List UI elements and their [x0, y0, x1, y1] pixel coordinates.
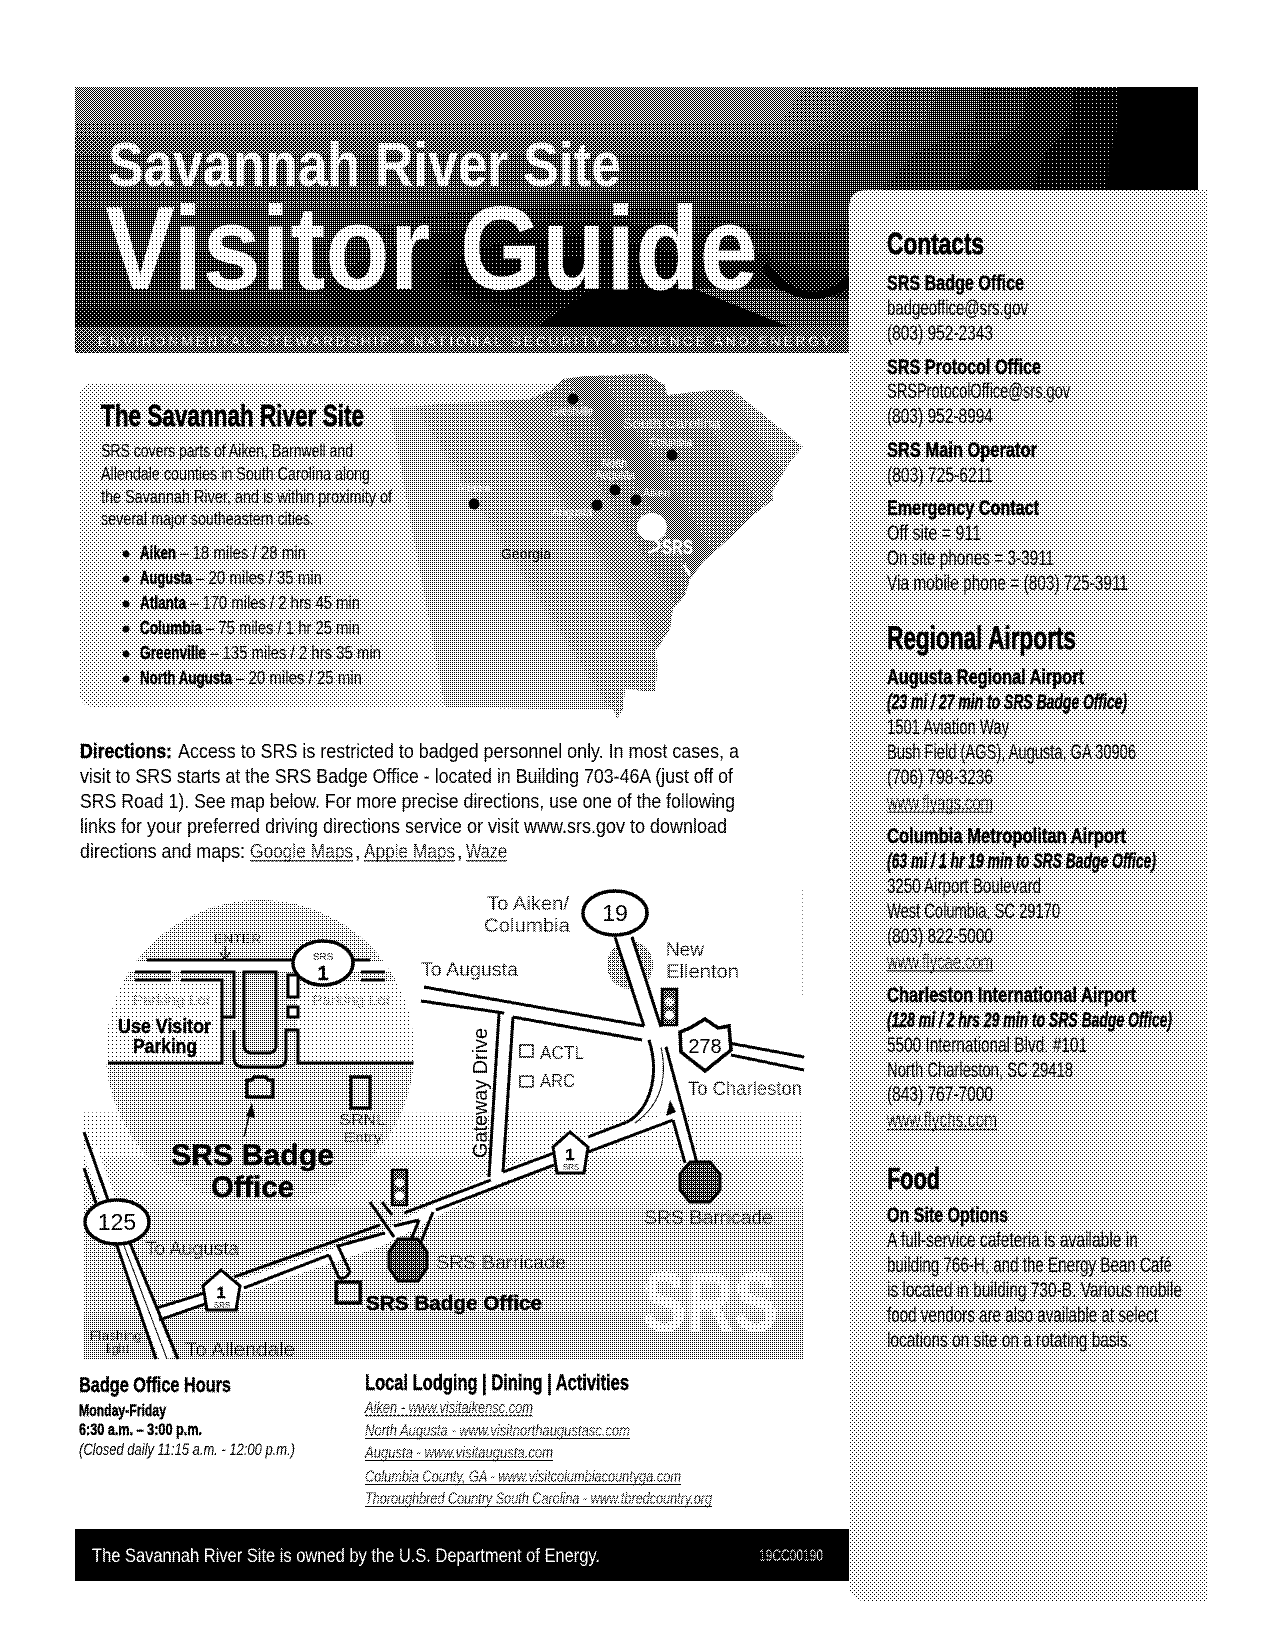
contacts section: (803) 952-2343 [887, 322, 993, 345]
inset circle: badge office area: SRNL [339, 1112, 386, 1129]
title [105, 131, 758, 315]
regional airports section: (706) 798-3236 [887, 766, 993, 789]
city distance list: – 20 miles / 35 min [196, 567, 322, 588]
city distance list: – 135 miles / 2 hrs 35 min [210, 642, 381, 663]
badge office hours: (Closed daily 11:15 a.m. - 12:00 p.m.) [79, 1440, 295, 1459]
map labels: light [106, 1341, 129, 1356]
map of south carolina and georgia: South Carolina [623, 415, 720, 431]
panel paragraph: the Savannah River, and is within proximity of [101, 486, 393, 507]
map labels: ARC [540, 1071, 575, 1091]
map of south carolina and georgia: Aiken [643, 486, 670, 500]
header banner [75, 87, 1198, 353]
inset circle: badge office area: Entry [344, 1129, 382, 1145]
map of south carolina and georgia: Augusta [552, 505, 592, 519]
header tagline: ENVIRONMENTAL STEWARDSHIP • NATIONAL SECURITY • SCIENCE AND ENERGY [98, 334, 831, 349]
directions text: visit to SRS starts at the SRS Badge Office - located in Building 703-46A (just off of [80, 766, 733, 788]
contacts section: On site phones = 3-3911 [887, 547, 1054, 570]
inset circle: badge office area: SRS Badge [171, 1139, 334, 1172]
city distance list [122, 542, 381, 688]
map labels: SRS Badge Office [366, 1293, 542, 1315]
map labels: To Augusta [421, 960, 518, 981]
local lodging links: Columbia County, GA - www.visitcolumbiacountyga.com [365, 1467, 681, 1486]
food section [887, 1161, 1182, 1352]
directions text: , [457, 841, 463, 863]
panel paragraph [101, 440, 393, 529]
regional airports section: www.flychs.com [886, 1109, 997, 1132]
map labels: To Aiken/ [487, 894, 570, 915]
panel heading: The Savannah River Site [101, 398, 364, 433]
map labels: New [666, 940, 704, 961]
panel paragraph: SRS covers parts of Aiken, Barnwell and [101, 440, 353, 461]
contacts section: Contacts [887, 226, 984, 261]
srs route shields: SRS [214, 1301, 230, 1310]
regional airports section: Columbia Metropolitan Airport [887, 825, 1126, 848]
city distance list: Columbia [140, 617, 203, 638]
badge office hours: Monday-Friday [79, 1401, 166, 1420]
local lodging links: Aiken - www.visitaikensc.com [364, 1398, 533, 1417]
contacts section: (803) 952-8994 [887, 405, 993, 428]
panel paragraph: Allendale counties in South Carolina along [101, 463, 370, 484]
srs road 1 marker: 1 [317, 963, 329, 985]
food section: A full-service cafeteria is available in [887, 1229, 1138, 1252]
city distance list: Greenville [140, 642, 206, 663]
local lodging links [364, 1370, 712, 1508]
road map [84, 890, 804, 1361]
footer bar: The Savannah River Site is owned by the U.S. Department of Energy. [92, 1546, 600, 1567]
srs road 1 marker: SRS [313, 952, 334, 963]
badge office hours: 6:30 a.m. – 3:00 p.m. [79, 1420, 202, 1439]
inset circle: badge office area: ENTER [214, 931, 261, 946]
local lodging links: Thoroughbred Country South Carolina - www.tbredcountry.org [365, 1489, 712, 1508]
us 278 shield: 278 [688, 1036, 722, 1058]
contacts section [887, 226, 1128, 595]
barricades [389, 1162, 720, 1281]
food section: On Site Options [887, 1204, 1008, 1227]
contacts section: (803) 725-6211 [887, 464, 993, 487]
inset circle: badge office area: Parking Lot [312, 992, 391, 1009]
regional airports section: (803) 822-5000 [887, 925, 993, 948]
regional airports section: Charleston International Airport [887, 984, 1136, 1007]
map labels: To Allendale [185, 1340, 295, 1361]
regional airports section: www.flyags.com [886, 792, 993, 815]
city distance list: – 170 miles / 2 hrs 45 min [190, 592, 360, 613]
regional airports section: 1501 Aviation Way [887, 716, 1009, 739]
map labels: SRS Barricade [436, 1253, 566, 1274]
contacts section: SRS Main Operator [887, 439, 1037, 462]
local lodging links: Augusta - www.visitaugusta.com [364, 1443, 553, 1462]
contacts section: SRS Protocol Office [887, 356, 1041, 379]
directions text: links for your preferred driving directions service or visit www.srs.gov to download [80, 816, 727, 838]
map of south carolina and georgia: Georgia [501, 546, 552, 563]
map labels: Gateway Drive [470, 1028, 492, 1158]
contacts section: Off site = 911 [887, 522, 981, 545]
directions text: Google Maps [250, 841, 353, 863]
regional airports section: Bush Field (AGS), Augusta, GA 30906 [887, 741, 1136, 764]
inset circle: badge office area: Office [211, 1171, 294, 1204]
new ellenton area [607, 941, 653, 989]
map labels: SRS Barricade [644, 1208, 773, 1229]
highway shield 125 [85, 1200, 149, 1244]
map labels [90, 894, 802, 1361]
srs route shields: SRS [563, 1163, 579, 1172]
inset circle: badge office area: Use Visitor [118, 1016, 211, 1038]
srs route shields [203, 1132, 588, 1310]
city distance list: Atlanta [140, 592, 187, 613]
map of south carolina and georgia: Atlanta [457, 481, 491, 495]
regional airports section: www.flycae.com [886, 951, 993, 974]
regional airports section: Augusta Regional Airport [887, 666, 1084, 689]
map labels: ACTL [540, 1043, 584, 1063]
map labels: To Augusta [145, 1239, 239, 1260]
regional airports section: 3250 Airport Boulevard [887, 875, 1041, 898]
badge office hours [79, 1374, 295, 1459]
us 278 shield [680, 1019, 731, 1071]
directions text [80, 741, 740, 863]
footer bar: 19CC00190 [759, 1546, 823, 1565]
title: Visitor Guide [105, 182, 758, 315]
contacts section: Emergency Contact [887, 497, 1039, 520]
badge office hours: Badge Office Hours [79, 1374, 231, 1397]
regional airports section: Regional Airports [887, 620, 1076, 656]
map labels: Columbia [484, 916, 570, 937]
map of south carolina and georgia: North [602, 456, 627, 470]
food section: building 766-H, and the Energy Bean Café [887, 1254, 1172, 1277]
panel: the savannah river site [79, 374, 803, 719]
map labels: Ellenton [666, 962, 739, 983]
map labels: To Charleston [688, 1079, 802, 1100]
regional airports section [886, 620, 1172, 1132]
map of south carolina and georgia: Augusta [595, 468, 635, 482]
footer bar [75, 1529, 850, 1581]
food section: Food [887, 1161, 940, 1196]
map labels: SRS [642, 1255, 778, 1349]
regional airports section: North Charleston, SC 29418 [887, 1059, 1073, 1082]
map of south carolina and georgia: Greenville [552, 404, 593, 418]
city distance list: – 75 miles / 1 hr 25 min [206, 617, 360, 638]
panel: sidebar [849, 190, 1208, 1601]
directions text: Directions: [80, 741, 172, 763]
food section: food vendors are also available at select [887, 1304, 1158, 1327]
city distance list: Aiken [140, 542, 176, 563]
inset circle: badge office area [100, 900, 420, 1204]
highway shield 19 [583, 891, 647, 935]
local lodging links: Local Lodging | Dining | Activities [365, 1370, 629, 1395]
contacts section: SRS Badge Office [887, 272, 1024, 295]
srs route shields: 1 [217, 1285, 226, 1302]
regional airports section: West Columbia, SC 29170 [887, 900, 1060, 923]
contacts section: Via mobile phone = (803) 725-3911 [887, 572, 1128, 595]
city distance list: North Augusta [140, 667, 233, 688]
directions text: Waze [466, 841, 507, 863]
map of south carolina and georgia: SRS [662, 537, 693, 559]
srs route shields: 1 [566, 1147, 575, 1164]
directions text: Access to SRS is restricted to badged personnel only. In most cases, a [178, 741, 740, 763]
traffic lights [392, 989, 677, 1205]
contacts section: badgeoffice@srs.gov [887, 297, 1028, 320]
city distance list: – 18 miles / 28 min [180, 542, 306, 563]
map labels: Flashing [90, 1328, 142, 1343]
directions text: Apple Maps [364, 841, 455, 863]
city distance list: – 20 miles / 25 min [236, 667, 362, 688]
map of south carolina and georgia: Columbia [650, 435, 692, 449]
contacts section: SRSProtocolOffice@srs.gov [887, 380, 1070, 403]
map of south carolina and georgia [390, 374, 803, 719]
panel paragraph: several major southeastern cities. [101, 508, 314, 529]
srs road 1 marker [293, 941, 353, 985]
regional airports section: 5500 International Blvd. #101 [887, 1034, 1087, 1057]
roads [84, 937, 804, 1359]
regional airports section: (23 mi / 27 min to SRS Badge Office) [887, 691, 1127, 714]
directions text: SRS Road 1). See map below. For more precise directions, use one of the following [80, 791, 735, 813]
inset circle: badge office area: Parking [133, 1036, 197, 1058]
directions text: directions and maps: [80, 841, 245, 863]
highway shield 19: 19 [602, 900, 628, 926]
regional airports section: (843) 767-7000 [887, 1083, 993, 1106]
city distance list: Augusta [140, 567, 192, 588]
local lodging links: North Augusta - www.visitnorthaugustasc.com [365, 1421, 630, 1440]
directions text: , [355, 841, 361, 863]
highway shield 125: 125 [98, 1209, 136, 1235]
inset circle: badge office area: Parking Lot [133, 992, 211, 1009]
title: Savannah River Site [108, 131, 621, 200]
food section: locations on site on a rotating basis. [887, 1329, 1132, 1352]
